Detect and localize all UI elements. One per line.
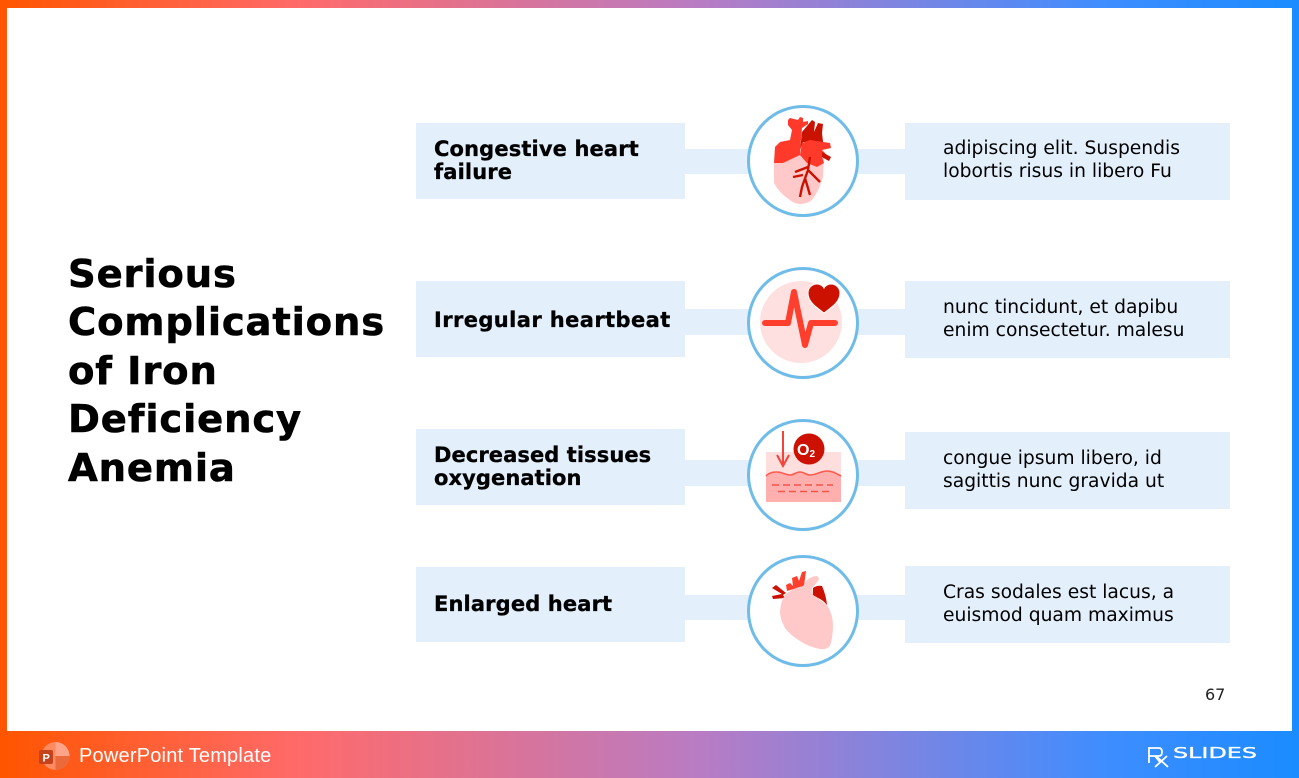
title: of Iron — [68, 349, 218, 394]
description panel — [905, 281, 1230, 358]
description panel — [905, 566, 1230, 643]
description text — [943, 138, 1180, 182]
label text — [434, 443, 651, 490]
footer: brand logo — [1148, 744, 1257, 768]
description text: Cras sodales est lacus, a — [943, 582, 1174, 603]
title: Complications — [68, 300, 385, 345]
description panel — [905, 432, 1230, 509]
title: Deficiency — [68, 397, 302, 442]
description panel — [905, 123, 1230, 200]
row 3: decreased tissues oxygenation — [416, 429, 1230, 509]
icon: heartbeat — [747, 267, 859, 379]
description text: nunc tincidunt, et dapibu — [943, 297, 1178, 318]
title — [68, 252, 385, 491]
wordmark: SLIDES — [1173, 744, 1257, 762]
connector — [685, 595, 1225, 620]
description text — [943, 297, 1185, 340]
label text: Congestive heart — [434, 137, 639, 161]
O2 label: 2 — [809, 449, 815, 460]
label text — [434, 137, 639, 184]
description text: lobortis risus in libero Fu — [943, 160, 1172, 182]
label text: oxygenation — [434, 466, 582, 490]
row 2: irregular heartbeat — [416, 281, 1230, 358]
description text: adipiscing elit. Suspendis — [943, 138, 1180, 159]
connector — [685, 149, 1225, 174]
connector — [685, 460, 1225, 486]
footer: powerpoint icon — [39, 742, 70, 770]
description text: congue ipsum libero, id — [943, 448, 1162, 469]
label text: Decreased tissues — [434, 443, 651, 467]
row 4: enlarged heart — [416, 566, 1230, 643]
description text — [943, 448, 1164, 492]
footer: label: PowerPoint Template — [79, 745, 271, 767]
icon: anatomical heart — [747, 105, 859, 217]
P letter: P — [42, 752, 50, 764]
description text: sagittis nunc gravida ut — [943, 470, 1164, 492]
O2 label: O — [797, 442, 809, 459]
title: Serious — [68, 252, 237, 297]
label panel — [416, 567, 685, 642]
description text: enim consectetur. malesu — [943, 320, 1185, 340]
icon: tissue oxygen — [747, 419, 859, 531]
description text: euismod quam maximus — [943, 604, 1174, 626]
label text: failure — [434, 160, 512, 184]
label panel — [416, 123, 685, 199]
page number: 67 — [1205, 685, 1225, 704]
title: Anemia — [68, 446, 236, 491]
label panel — [416, 429, 685, 505]
label text: Irregular heartbeat — [434, 308, 671, 332]
connector — [685, 309, 1225, 335]
row 1: congestive heart failure — [416, 123, 1230, 200]
label text: Enlarged heart — [434, 592, 612, 616]
description text — [943, 582, 1174, 626]
icon: enlarged heart — [747, 555, 859, 667]
label panel — [416, 281, 685, 357]
